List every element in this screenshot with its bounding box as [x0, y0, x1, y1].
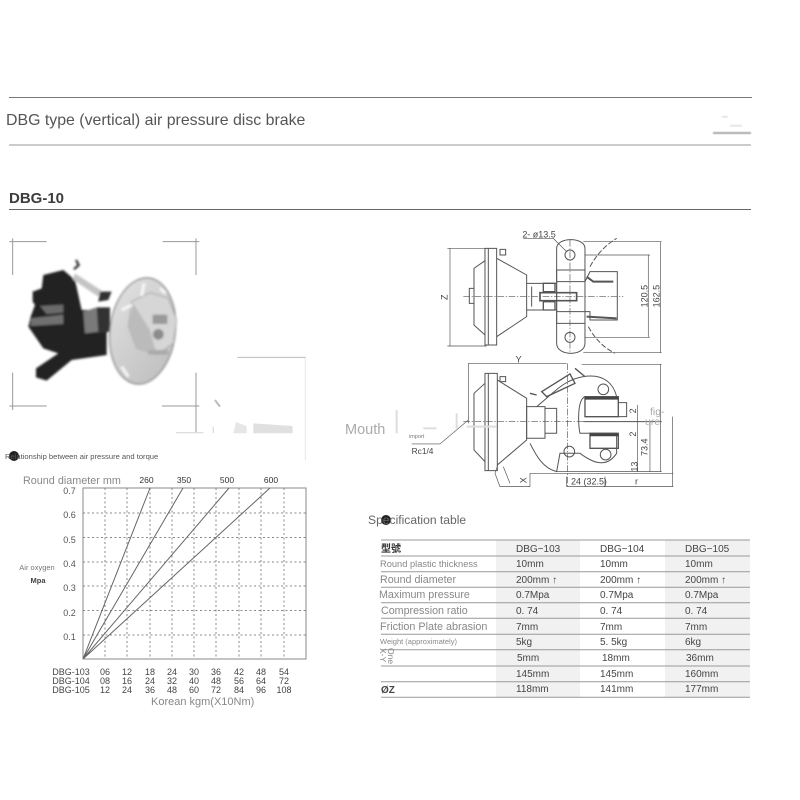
- x axis model rows: 24: [122, 685, 132, 695]
- section heading: DBG-10: [9, 190, 64, 207]
- x axis model rows: 18: [145, 667, 155, 677]
- disc diameter labels: 350: [177, 475, 191, 485]
- row labels: Weight (approximately): [380, 637, 457, 646]
- specification table: [378, 540, 750, 697]
- column DBG-104: 145mm: [600, 669, 633, 680]
- torque lines: [83, 488, 270, 659]
- y axis ticks: 0.7: [63, 486, 76, 496]
- side view labels: 13: [630, 462, 640, 472]
- label: figure: ure: [645, 416, 660, 428]
- column DBG-105: 0. 74: [685, 606, 708, 617]
- column DBG-104: 141mm: [600, 684, 633, 695]
- row labels: 型號: [381, 542, 401, 555]
- chart heading: Relationship between air pressure and torque: [5, 452, 158, 461]
- row labels: Friction Plate abrasion: [380, 621, 487, 633]
- column DBG-105: 6kg: [685, 637, 701, 648]
- column DBG-104: [600, 544, 645, 695]
- faded background fragment: [176, 357, 306, 460]
- column DBG-103: 200mm ↑: [516, 575, 557, 586]
- column DBG-103: 0. 74: [516, 606, 539, 617]
- x axis model rows: 36: [211, 667, 221, 677]
- side view labels: [412, 355, 649, 486]
- x axis model rows: 16: [122, 676, 132, 686]
- row labels: Round diameter: [380, 574, 456, 586]
- x axis model rows: 72: [279, 676, 289, 686]
- y axis ticks: [63, 486, 76, 642]
- x axis model rows: 30: [189, 667, 199, 677]
- disc diameter labels: [139, 475, 278, 485]
- plot frame: [83, 488, 306, 659]
- column DBG-105: 177mm: [685, 684, 718, 695]
- x axis model rows: 24: [167, 667, 177, 677]
- x axis model rows: 36: [145, 685, 155, 695]
- x axis model rows: DBG-105: [52, 685, 90, 695]
- y axis ticks: 0.4: [63, 559, 76, 569]
- x axis model rows: DBG-104: [52, 676, 90, 686]
- row labels: X-Y: [378, 648, 388, 662]
- top view labels: Z: [439, 294, 449, 300]
- y axis ticks: 0.5: [63, 535, 76, 545]
- disc diameter labels: 500: [220, 475, 234, 485]
- row labels: [378, 542, 487, 696]
- column DBG-105: 160mm: [685, 669, 718, 680]
- row labels: ØZ: [381, 685, 395, 696]
- column DBG-103: [516, 544, 561, 695]
- column DBG-105: DBG−105: [685, 544, 730, 555]
- title: DBG type (vertical) air pressure disc brake: [6, 112, 306, 129]
- column DBG-105: 36mm: [686, 653, 714, 664]
- technical drawing: top view: [447, 238, 662, 353]
- table heading: Specification table: [368, 513, 466, 527]
- x axis model rows: 12: [122, 667, 132, 677]
- top view labels: 120.5: [639, 285, 649, 307]
- column DBG-104: 5. 5kg: [600, 637, 627, 648]
- column DBG-105: 10mm: [685, 559, 713, 570]
- column DBG-104: 0. 74: [600, 606, 623, 617]
- side view labels: 2: [628, 432, 638, 437]
- grid lines: [83, 488, 306, 659]
- x axis model rows: 72: [211, 685, 221, 695]
- faded logo: [713, 116, 751, 134]
- x axis model rows: 54: [279, 667, 289, 677]
- column DBG-104: 10mm: [600, 559, 628, 570]
- section rule: [9, 208, 751, 210]
- y axis ticks: 0.2: [63, 608, 76, 618]
- row labels: Round plastic thickness: [380, 559, 478, 569]
- side view labels: Rc1/4: [412, 446, 434, 456]
- header rule top: [9, 96, 752, 98]
- x axis model rows: 48: [211, 676, 221, 686]
- label: mouth: Mouth: [345, 422, 385, 438]
- x axis title: Korean kgm(X10Nm): [151, 696, 254, 708]
- column DBG-105: [685, 544, 730, 695]
- label: import: import: [409, 434, 425, 440]
- x axis model rows: [52, 667, 292, 695]
- y axis ticks: 0.3: [63, 583, 76, 593]
- side view labels: X: [519, 477, 529, 483]
- row labels: Maximum pressure: [379, 589, 470, 601]
- shaded columns: [496, 540, 750, 697]
- x axis model rows: 24: [145, 676, 155, 686]
- disc diameter labels: 260: [139, 475, 154, 485]
- x axis model rows: 12: [100, 685, 110, 695]
- x axis model rows: 06: [100, 667, 110, 677]
- y axis title: Mpa: [30, 576, 46, 585]
- x axis model rows: 08: [100, 676, 110, 686]
- x axis model rows: 64: [256, 676, 266, 686]
- x axis model rows: 84: [234, 685, 244, 695]
- row labels: Compression ratio: [381, 605, 468, 617]
- x axis model rows: 42: [234, 667, 244, 677]
- side view labels: 73.4: [639, 438, 649, 456]
- column DBG-103: 10mm: [516, 559, 544, 570]
- column DBG-103: 118mm: [516, 684, 549, 695]
- header rule bottom: [9, 144, 751, 146]
- column DBG-104: 18mm: [602, 653, 630, 664]
- top view labels: 162.5: [651, 285, 661, 307]
- column DBG-103: DBG−103: [516, 544, 561, 555]
- product photo: disc brake: [9, 238, 199, 433]
- label: figure: fig-: [650, 406, 665, 418]
- column DBG-103: 5mm: [517, 653, 539, 664]
- x axis model rows: 40: [189, 676, 199, 686]
- label: figure: [645, 406, 665, 428]
- faded inlet fragment: [397, 410, 497, 433]
- top view labels: 2- ø13.5: [522, 229, 556, 239]
- side view labels: Y: [516, 355, 522, 365]
- column DBG-103: 0.7Mpa: [516, 590, 550, 601]
- x axis model rows: 96: [256, 685, 266, 695]
- y axis title: Air oxygen: [19, 563, 55, 572]
- x axis model rows: 32: [167, 676, 177, 686]
- technical drawing: side view: [412, 363, 673, 487]
- column DBG-104: DBG−104: [600, 544, 645, 555]
- column DBG-105: 0.7Mpa: [685, 590, 719, 601]
- y axis title: [19, 563, 55, 585]
- y axis ticks: 0.1: [63, 632, 76, 642]
- x axis model rows: 108: [276, 685, 292, 695]
- side view labels: 2: [628, 408, 638, 413]
- y axis ticks: 0.6: [63, 510, 76, 520]
- column DBG-105: 200mm ↑: [685, 575, 726, 586]
- row labels: One: [386, 648, 396, 664]
- column DBG-103: 7mm: [516, 622, 538, 633]
- x axis model rows: 48: [167, 685, 177, 695]
- x axis model rows: 60: [189, 685, 199, 695]
- side view labels: 24 (32.5): [571, 476, 607, 486]
- column DBG-103: 5kg: [516, 637, 532, 648]
- x axis model rows: 48: [256, 667, 266, 677]
- x axis model rows: 56: [234, 676, 244, 686]
- column DBG-104: 200mm ↑: [600, 575, 641, 586]
- column DBG-104: 7mm: [600, 622, 622, 633]
- column DBG-103: 145mm: [516, 669, 549, 680]
- top view labels: [439, 229, 661, 307]
- disc diameter labels: 600: [264, 475, 278, 485]
- side view labels: r: [635, 476, 638, 486]
- column DBG-105: 7mm: [685, 622, 707, 633]
- row rules: [381, 540, 750, 697]
- line chart: air pressure vs torque: [19, 475, 306, 708]
- column DBG-104: 0.7Mpa: [600, 590, 634, 601]
- x axis model rows: DBG-103: [52, 667, 90, 677]
- chart top label: Round diameter mm: [23, 475, 121, 487]
